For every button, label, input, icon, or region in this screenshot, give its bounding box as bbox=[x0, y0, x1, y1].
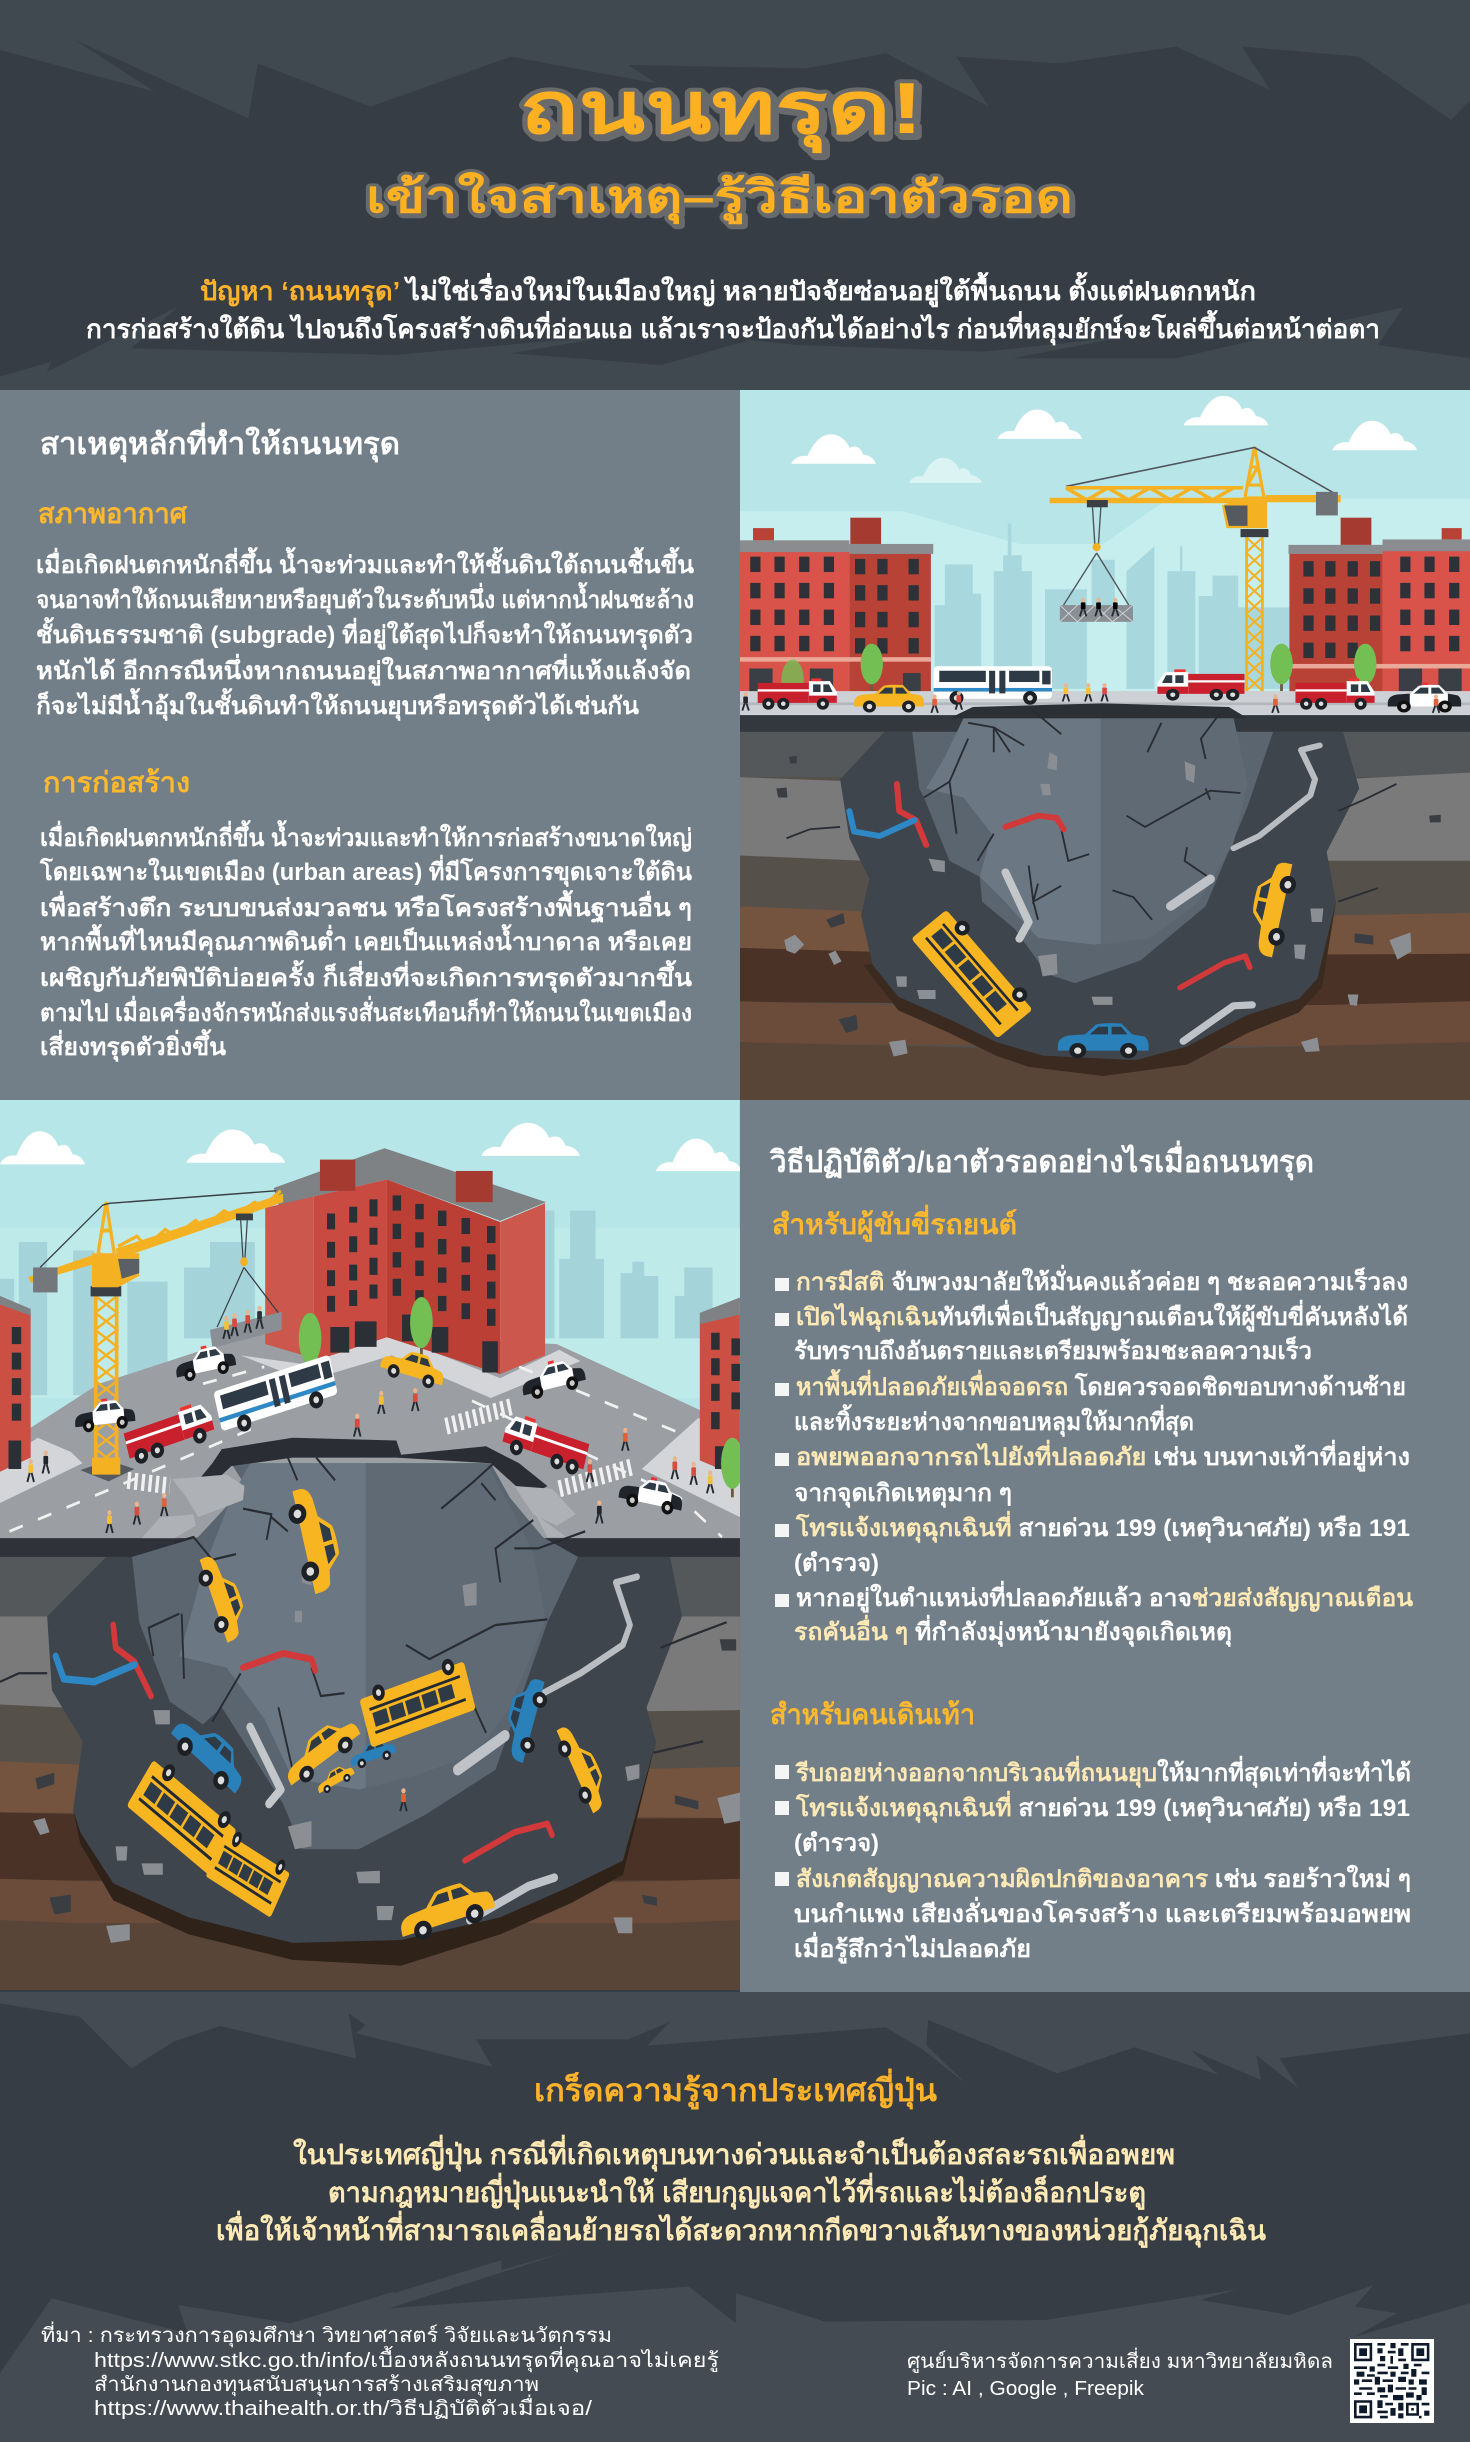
list: driver tips: หากอยู่ในตำแหน่งที่ปลอดภัยแล้ว อาจ ช่วยส่งสัญญาณเตือน bbox=[796, 1580, 1414, 1613]
heading: main causes: สาเหตุหลักที่ทำให้ถนนทรุด bbox=[40, 422, 400, 463]
panel: causes bbox=[0, 390, 740, 1100]
list: pedestrian tips: บนกำแพง เสียงลั่นของโครงสร้าง และเตรียมพร้อมอพยพ bbox=[794, 1896, 1411, 1928]
list: pedestrian tips: โทรแจ้งเหตุฉุกเฉินที่ สายด่วน 199 (เหตุวินาศภัย) หรือ 191 bbox=[795, 1790, 1410, 1824]
fallen school buses bbox=[127, 1653, 476, 1918]
list: pedestrian tips: (ตำรวจ) bbox=[794, 1830, 879, 1857]
illustration: collapsed intersection bbox=[0, 1100, 744, 1990]
soil layers bbox=[0, 1538, 740, 1990]
sources: https://www.stkc.go.th/info/เบื้องหลังถนนทรุดที่คุณอาจไม่เคยรู้ bbox=[94, 2346, 719, 2373]
text: construction: เสี่ยงทรุดตัวยิ่งขึ้น bbox=[40, 1028, 227, 1063]
intro text: การก่อสร้างใต้ดิน ไปจนถึงโครงสร้างดินที่อ่อนแอ แล้วเราจะป้องกันได้อย่างไร ก่อนที่หลุมยักษ์จะโผล่ขึ้นต่อหน้าต่อตา bbox=[86, 309, 1380, 346]
credits: Pic : AI , Google , Freepik bbox=[907, 2378, 1145, 2400]
list: pedestrian tips bbox=[775, 1755, 1411, 1964]
intro text bbox=[86, 271, 1380, 346]
cracks bbox=[0, 1458, 727, 1770]
text: Japan note: เพื่อให้เจ้าหน้าที่สามารถเคลื่อนย้ายรถได้สะดวกหากกีดขวางเส้นทางของหน่วยกู้ภัยฉุกเฉิน bbox=[216, 2210, 1266, 2248]
trees bbox=[781, 644, 1376, 707]
text: weather: ชั้นดินธรรมชาติ (subgrade) ที่อยู่ใต้สุดไปก็จะทำให้ถนนทรุดตัว bbox=[36, 616, 693, 651]
text: weather: เมื่อเกิดฝนตกหนักถี่ขึ้น น้ำจะท่วมและทำให้ชั้นดินใต้ถนนชื้นขึ้น bbox=[36, 546, 695, 579]
underground pipes bbox=[56, 1577, 637, 1920]
clouds bbox=[0, 1123, 742, 1171]
list: driver tips: และทิ้งระยะห่างจากขอบหลุมให้มากที่สุด bbox=[794, 1403, 1194, 1438]
pedestrians bbox=[742, 683, 1439, 713]
text: weather: หนักได้ อีกกรณีหนึ่งหากถนนอยู่ในสภาพอากาศที่แห้งแล้งจัด bbox=[36, 653, 691, 686]
side buildings bbox=[0, 1296, 740, 1477]
clouds bbox=[791, 396, 1417, 483]
text: Japan note: ในประเทศญี่ปุ่น กรณีที่เกิดเหตุบนทางด่วนและจำเป็นต้องสละรถเพื่ออพยพ bbox=[293, 2134, 1175, 2172]
sources: https://www.thaihealth.or.th/วิธีปฏิบัติตัวเมื่อเจอ/ bbox=[94, 2394, 593, 2420]
subheading: for pedestrians: สำหรับคนเดินเท้า bbox=[770, 1699, 975, 1730]
text: construction: ตามไป เมื่อเครื่องจักรหนักส่งแรงสั่นสะเทือนก็ทำให้ถนนในเขตเมือง bbox=[40, 995, 692, 1027]
cracks bbox=[787, 707, 1396, 920]
subheading: weather: สภาพอากาศ bbox=[38, 498, 188, 529]
text: construction: เมื่อเกิดฝนตกหนักถี่ขึ้น น้ำจะท่วมและทำให้การก่อสร้างขนาดใหญ่ bbox=[40, 819, 692, 852]
text: Japan note bbox=[216, 2134, 1266, 2248]
list: driver tips: เปิดไฟฉุกเฉินทันทีเพื่อเป็นสัญญาณเตือนให้ผู้ขับขี่คันหลังได้ bbox=[796, 1299, 1408, 1333]
list: driver tips: หาพื้นที่ปลอดภัยเพื่อจอดรถ โดยควรจอดชิดขอบทางด้านซ้าย bbox=[796, 1368, 1406, 1401]
fallen vehicles bbox=[166, 1481, 613, 1946]
road vehicles bbox=[74, 1340, 685, 1517]
soil layers bbox=[740, 732, 1470, 1100]
rocks bbox=[33, 1565, 740, 1943]
platform workers bbox=[1080, 598, 1119, 616]
sinkhole bbox=[840, 703, 1359, 1076]
intro text: ปัญหา ‘ถนนทรุด’ ไม่ใช่เรื่องใหม่ในเมืองใหญ่ หลายปัจจัยซ่อนอยู่ใต้พื้นถนน ตั้งแต่ฝนตกหนัก bbox=[200, 271, 1256, 308]
list: driver tips: อพยพออกจากรถไปยังที่ปลอดภัย เช่น บนทางเท้าที่อยู่ห่าง bbox=[796, 1439, 1410, 1472]
building right bbox=[1288, 518, 1470, 702]
list: driver tips: โทรแจ้งเหตุฉุกเฉินที่ สายด่วน 199 (เหตุวินาศภัย) หรือ 191 bbox=[795, 1510, 1410, 1544]
underground pipes bbox=[849, 745, 1320, 1041]
building left bbox=[740, 518, 933, 702]
text: weather: จนอาจทำให้ถนนเสียหายหรือยุบตัวในระดับหนึ่ง แต่หากน้ำฝนชะล้าง bbox=[36, 581, 694, 616]
illustration: sinkhole side view bbox=[740, 390, 1470, 1100]
text: construction: โดยเฉพาะในเขตเมือง (urban areas) ที่มีโครงการขุดเจาะใต้ดิน bbox=[39, 854, 693, 888]
sources: ที่มา : กระทรวงการอุดมศึกษา วิทยาศาสตร์ วิจัยและนวัตกรรม bbox=[41, 2321, 612, 2348]
list: driver tips bbox=[775, 1264, 1414, 1648]
list: driver tips: (ตำรวจ) bbox=[794, 1550, 879, 1577]
text: construction: เผชิญกับภัยพิบัติบ่อยครั้ง ก็เสี่ยงที่จะเกิดการทรุดตัวมากขึ้น bbox=[40, 959, 693, 994]
platform workers bbox=[223, 1306, 263, 1339]
list: driver tips: รับทราบถึงอันตรายและเตรียมพร้อมชะลอความเร็ว bbox=[794, 1336, 1312, 1365]
crane bbox=[28, 1191, 283, 1481]
list: driver tips: รถคันอื่น ๆ ที่กำลังมุ่งหน้ามายังจุดเกิดเหตุ bbox=[794, 1614, 1232, 1648]
list: driver tips: จากจุดเกิดเหตุมาก ๆ bbox=[794, 1480, 1012, 1509]
list: pedestrian tips: สังเกตสัญญาณความผิดปกติของอาคาร เช่น รอยร้าวใหม่ ๆ bbox=[796, 1864, 1411, 1893]
text: weather bbox=[36, 546, 695, 722]
list: pedestrian tips: เมื่อรู้สึกว่าไม่ปลอดภัย bbox=[794, 1931, 1031, 1964]
school bus fallen bbox=[911, 905, 1038, 1038]
sources bbox=[41, 2321, 719, 2420]
subtitle: เข้าใจสาเหตุ–รู้วิธีเอาตัวรอด bbox=[366, 171, 1073, 225]
text: Japan note: ตามกฎหมายญี่ปุ่นแนะนำให้ เสียบกุญแจคาไว้ที่รถและไม่ต้องล็อกประตู bbox=[328, 2172, 1146, 2210]
street vehicles bbox=[758, 666, 1461, 713]
text: construction: เพื่อสร้างตึก ระบบขนส่งมวลชน หรือโครงสร้างพื้นฐานอื่น ๆ bbox=[40, 889, 692, 924]
sources: สำนักงานกองทุนสนับสนุนการสร้างเสริมสุขภาพ bbox=[94, 2374, 539, 2397]
crane bbox=[1050, 447, 1341, 705]
subheading: construction: การก่อสร้าง bbox=[43, 767, 190, 798]
street layer bbox=[740, 691, 1470, 732]
footer background bbox=[0, 1992, 1470, 2442]
title: ถนนทรุด! bbox=[520, 69, 923, 154]
heading: how to survive: วิธีปฏิบัติตัว/เอาตัวรอดอย่างไรเมื่อถนนทรุด bbox=[769, 1140, 1314, 1181]
heading: lessons from Japan: เกร็ดความรู้จากประเทศญี่ปุ่น bbox=[534, 2068, 937, 2110]
subheading: for drivers: สำหรับผู้ขับขี่รถยนต์ bbox=[772, 1204, 1017, 1242]
broken road slabs bbox=[142, 1438, 576, 1538]
list: pedestrian tips: รีบถอยห่างออกจากบริเวณที่ถนนยุบให้มากที่สุดเท่าที่จะทำได้ bbox=[795, 1755, 1411, 1789]
text: weather: ก็จะไม่มีน้ำอุ้มในชั้นดินทำให้ถนนยุบหรือทรุดตัวได้เช่นกัน bbox=[36, 687, 640, 722]
credits bbox=[907, 2347, 1333, 2400]
panel: survival steps bbox=[740, 1100, 1470, 1992]
list: driver tips: การมีสติ จับพวงมาลัยให้มั่นคงแล้วค่อย ๆ ชะลอความเร็วลง bbox=[796, 1264, 1408, 1296]
blue car bbox=[1058, 1023, 1149, 1058]
credits: ศูนย์บริหารจัดการความเสี่ยง มหาวิทยาลัยมหิดล bbox=[907, 2347, 1333, 2374]
header background bbox=[0, 0, 1470, 390]
road surface bbox=[0, 1330, 740, 1538]
trees bbox=[299, 1297, 744, 1497]
taxi fallen bbox=[1243, 858, 1300, 959]
rocks bbox=[776, 752, 1441, 1057]
building center bbox=[265, 1148, 546, 1374]
QR code bbox=[1350, 2339, 1434, 2423]
sinkhole bbox=[47, 1463, 682, 1966]
pedestrians bbox=[27, 1388, 714, 1811]
text: construction bbox=[39, 819, 693, 1063]
text: construction: หากพื้นที่ไหนมีคุณภาพดินต่ำ เคยเป็นแหล่งน้ำบาดาล หรือเคย bbox=[40, 923, 692, 958]
